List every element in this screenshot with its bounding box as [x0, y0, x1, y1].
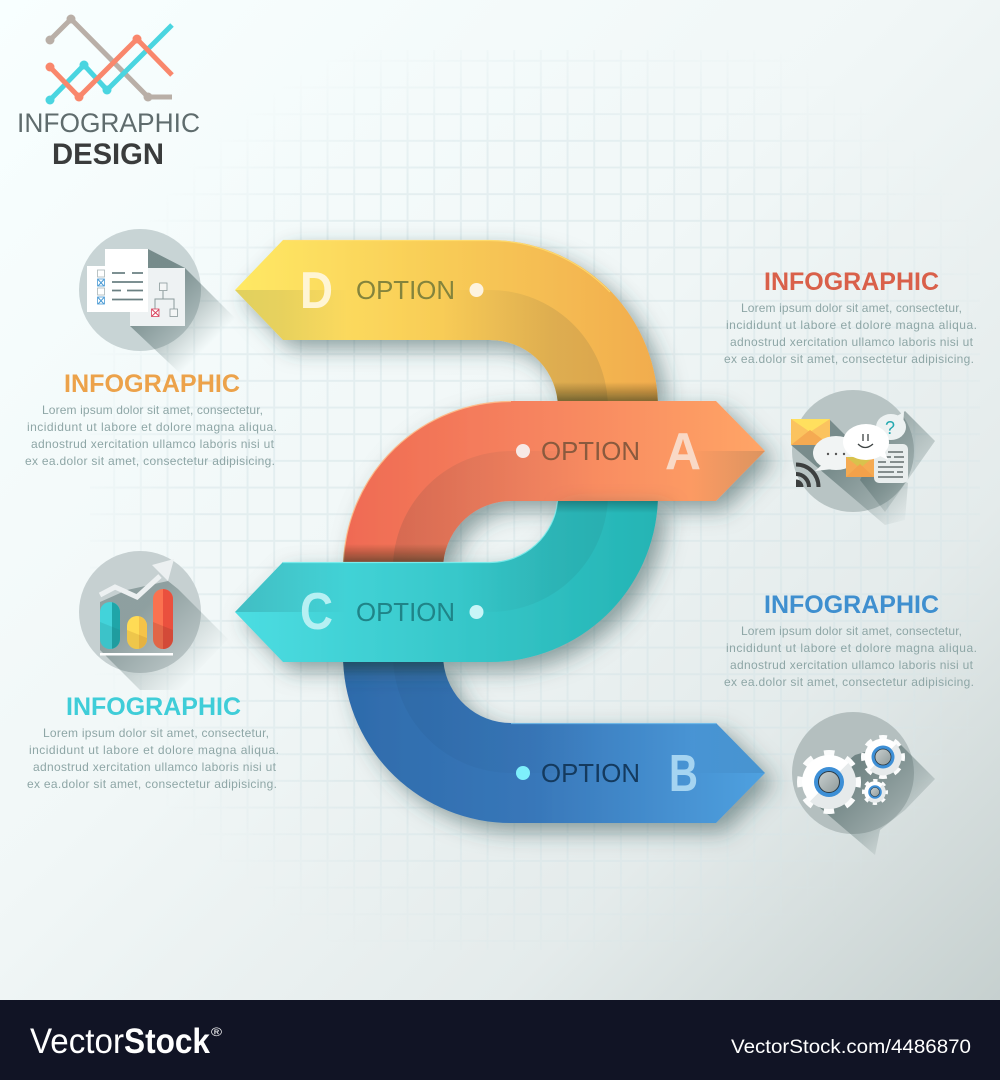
bubble smile [843, 424, 889, 460]
paragraph D: ex ea.dolor sit amet, consectetur adipisicing. [25, 454, 275, 468]
paragraph A: adnostrud xercitation ullamco laboris nisi ut [730, 335, 974, 349]
letter C: C [300, 583, 333, 641]
paragraph B: adnostrud xercitation ullamco laboris nisi ut [730, 658, 974, 672]
envelope small [846, 457, 874, 477]
icon: communication [791, 390, 935, 525]
logo subtitle: DESIGN [52, 138, 164, 171]
envelope large [791, 419, 830, 445]
rss [796, 464, 818, 487]
paragraph C: Lorem ipsum dolor sit amet, consectetur, [43, 726, 269, 740]
option label A: OPTION [541, 436, 640, 466]
paragraph C: adnostrud xercitation ullamco laboris nisi ut [33, 760, 277, 774]
ribbon D yellow [235, 240, 670, 401]
letter D: D [300, 262, 333, 320]
letter A: A [665, 423, 701, 481]
bubble question: ? [885, 418, 895, 438]
dot A [516, 444, 530, 458]
bubble dots [813, 436, 859, 471]
footer image id: VectorStock.com/4486870 [731, 1037, 971, 1058]
heading D: INFOGRAPHIC [64, 370, 240, 398]
footer bar [0, 1000, 1000, 1080]
paragraph A [724, 301, 977, 366]
document [874, 444, 908, 483]
gear medium [864, 738, 902, 776]
bubble question [876, 412, 906, 440]
text block: B blue [724, 591, 977, 689]
icon: bar chart [79, 551, 228, 690]
paragraph D: incididunt ut labore et dolore magna aliqua. [27, 420, 277, 434]
ribbon A coral [335, 401, 765, 562]
icon: gears [792, 712, 935, 855]
paragraph A: ex ea.dolor sit amet, consectetur adipisicing. [724, 352, 974, 366]
bar teal [100, 602, 120, 649]
ribbon B blue [335, 662, 765, 823]
paragraph D [25, 403, 277, 468]
paragraph A: incididunt ut labore et dolore magna aliqua. [726, 318, 977, 332]
paragraph A: Lorem ipsum dolor sit amet, consectetur, [741, 301, 962, 315]
logo title: INFOGRAPHIC [17, 108, 200, 138]
bar yellow [127, 616, 147, 649]
paragraph B: Lorem ipsum dolor sit amet, consectetur, [741, 624, 962, 638]
heading B: INFOGRAPHIC [764, 591, 939, 619]
text block: C teal [27, 693, 279, 791]
logo: infographic design [17, 14, 200, 171]
footer logo: ® [211, 1025, 222, 1039]
letter B: B [669, 745, 698, 803]
paragraph B: ex ea.dolor sit amet, consectetur adipisicing. [724, 675, 974, 689]
heading A: INFOGRAPHIC [764, 268, 939, 296]
paragraph C: incididunt ut labore et dolore magna aliqua. [29, 743, 279, 757]
ribbon C teal [235, 501, 670, 662]
text block: A coral [724, 268, 977, 366]
option label C: OPTION [356, 597, 455, 627]
paragraph B [724, 624, 977, 689]
dot B [516, 766, 530, 780]
paragraph C: ex ea.dolor sit amet, consectetur adipisicing. [27, 777, 277, 791]
logo line chart [46, 14, 172, 104]
dot D [470, 283, 484, 297]
paragraph D: Lorem ipsum dolor sit amet, consectetur, [42, 403, 263, 417]
option label B: OPTION [541, 758, 640, 788]
icon: documents [79, 229, 240, 378]
heading C: INFOGRAPHIC [66, 693, 241, 721]
dot C [470, 605, 484, 619]
paragraph D: adnostrud xercitation ullamco laboris nisi ut [31, 437, 275, 451]
text block: D orange [25, 370, 277, 468]
footer logo [30, 1022, 222, 1061]
option label D: OPTION [356, 275, 455, 305]
footer logo: Vector [30, 1022, 124, 1061]
footer logo: Stock [124, 1022, 210, 1061]
gear small [864, 780, 886, 804]
paragraph B: incididunt ut labore et dolore magna aliqua. [726, 641, 977, 655]
paragraph C [27, 726, 279, 791]
bar red [153, 589, 173, 649]
gear large [801, 754, 857, 810]
